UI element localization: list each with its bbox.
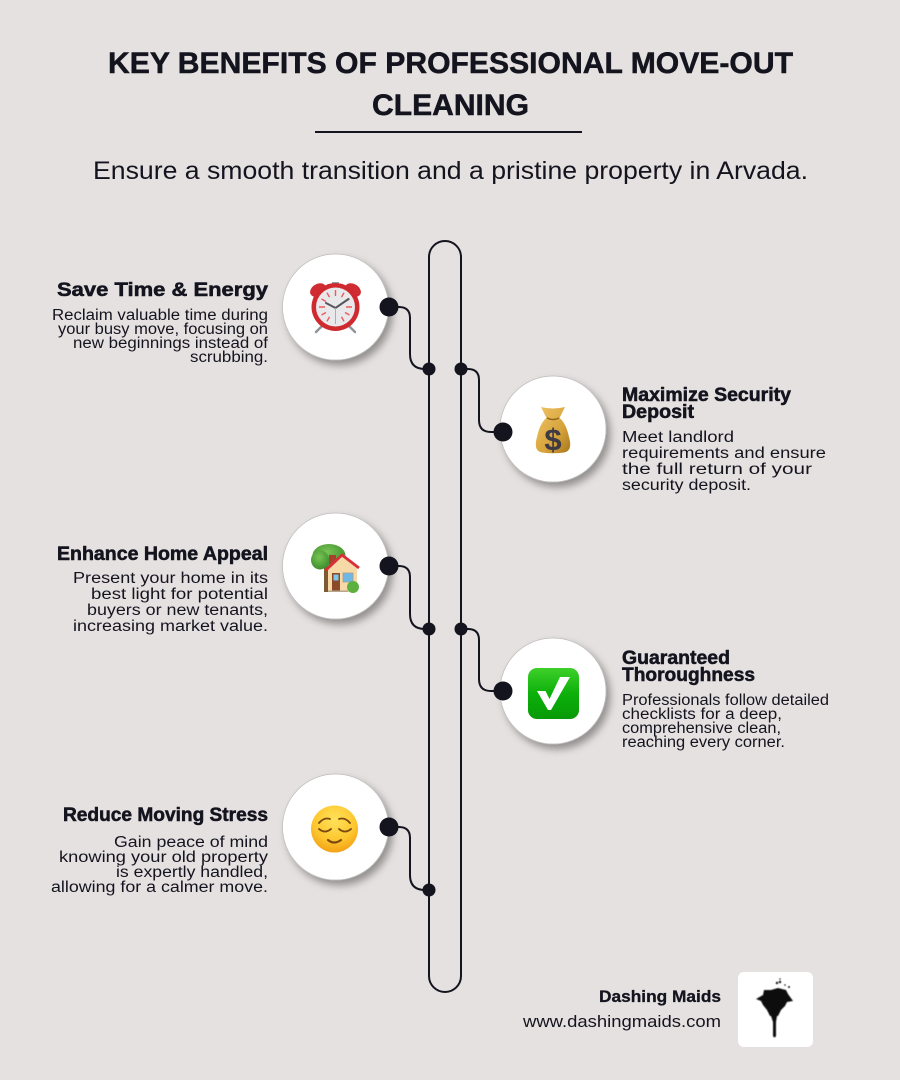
text block: moving stress bbox=[51, 834, 268, 896]
text block: save time: Reclaim valuable time during bbox=[52, 307, 268, 324]
heading: save time: Save Time & Energy bbox=[57, 279, 268, 301]
icon: money bag: $ bbox=[544, 422, 562, 457]
text block: home appeal: increasing market value. bbox=[73, 618, 268, 635]
text block: home appeal bbox=[73, 570, 268, 635]
connector: save time bbox=[389, 307, 429, 369]
text block: moving stress: knowing your old property bbox=[59, 849, 268, 866]
icon circle: home appeal bbox=[282, 513, 388, 619]
icon: relieved face bbox=[311, 806, 358, 852]
text block: save time: new beginnings instead of bbox=[73, 335, 269, 352]
logo bbox=[738, 972, 813, 1047]
icon: alarm clock bbox=[308, 280, 363, 332]
text block: home appeal: buyers or new tenants, bbox=[87, 602, 268, 619]
connector: home appeal bbox=[389, 566, 429, 629]
rail dot: moving stress bbox=[422, 884, 436, 896]
panel: save time and energy bbox=[52, 254, 436, 376]
panel: maximize security deposit bbox=[454, 362, 826, 494]
connector dot: moving stress bbox=[380, 818, 398, 836]
connector dot: security deposit bbox=[494, 422, 512, 442]
heading: thoroughness: Guaranteed bbox=[622, 647, 730, 669]
panel: enhance home appeal bbox=[57, 513, 436, 636]
connector dot: save time bbox=[380, 298, 398, 316]
title bbox=[108, 47, 793, 122]
text block: thoroughness: checklists for a deep, bbox=[622, 706, 782, 723]
text block: security deposit: Meet landlord bbox=[622, 429, 734, 446]
heading: thoroughness: Thoroughness bbox=[622, 664, 755, 686]
text block: thoroughness: reaching every corner. bbox=[622, 734, 785, 751]
heading: thoroughness bbox=[622, 647, 755, 686]
icon: feather duster bbox=[756, 978, 793, 1038]
text block: home appeal: best light for potential bbox=[91, 586, 268, 603]
icon circle: save time bbox=[282, 254, 388, 360]
text block: moving stress: Gain peace of mind bbox=[114, 834, 268, 851]
icon circle: security deposit bbox=[500, 376, 606, 482]
text block: save time: scrubbing. bbox=[190, 349, 268, 366]
website: www.dashingmaids.com bbox=[522, 1012, 721, 1031]
icon: house with tree bbox=[311, 544, 359, 593]
central timeline rail bbox=[429, 241, 461, 992]
text block: security deposit: the full return of your bbox=[622, 461, 812, 478]
connector: security deposit bbox=[461, 369, 503, 432]
text block: home appeal: Present your home in its bbox=[73, 570, 268, 587]
panel: guaranteed thoroughness bbox=[454, 622, 829, 751]
title: KEY BENEFITS OF PROFESSIONAL MOVE-OUT bbox=[108, 47, 793, 80]
connector dot: home appeal bbox=[380, 556, 398, 576]
icon circle: moving stress bbox=[282, 774, 388, 880]
icon: money bag bbox=[536, 407, 570, 457]
heading: security deposit bbox=[622, 384, 791, 423]
heading: home appeal: Enhance Home Appeal bbox=[57, 543, 268, 565]
heading: security deposit: Deposit bbox=[622, 401, 695, 423]
connector dot: thoroughness bbox=[494, 682, 512, 700]
brand name: Dashing Maids bbox=[599, 988, 721, 1006]
text block: security deposit: security deposit. bbox=[622, 477, 751, 494]
title: CLEANING bbox=[372, 89, 529, 122]
icon: check mark bbox=[528, 668, 579, 719]
text block: moving stress: allowing for a calmer move. bbox=[51, 879, 268, 896]
icon circle: thoroughness bbox=[500, 638, 606, 744]
text block: save time: your busy move, focusing on bbox=[58, 321, 268, 338]
rail dot: thoroughness bbox=[454, 622, 468, 636]
heading: moving stress: Reduce Moving Stress bbox=[63, 804, 268, 826]
text block: security deposit bbox=[622, 429, 826, 494]
rail dot: save time bbox=[422, 362, 436, 376]
connector: moving stress bbox=[389, 827, 429, 890]
text block: security deposit: requirements and ensure bbox=[622, 445, 826, 462]
text block: moving stress: is expertly handled, bbox=[116, 864, 268, 881]
text block: thoroughness: comprehensive clean, bbox=[622, 720, 781, 737]
text block: thoroughness bbox=[622, 692, 829, 751]
rail dot: home appeal bbox=[422, 622, 436, 636]
text block: thoroughness: Professionals follow detailed bbox=[622, 692, 829, 709]
subtitle: Ensure a smooth transition and a pristine property in Arvada. bbox=[93, 157, 808, 185]
panel: reduce moving stress bbox=[51, 774, 436, 896]
connector: thoroughness bbox=[461, 629, 503, 691]
heading: security deposit: Maximize Security bbox=[622, 384, 791, 406]
text block: save time bbox=[52, 307, 269, 366]
rail dot: security deposit bbox=[454, 362, 468, 376]
